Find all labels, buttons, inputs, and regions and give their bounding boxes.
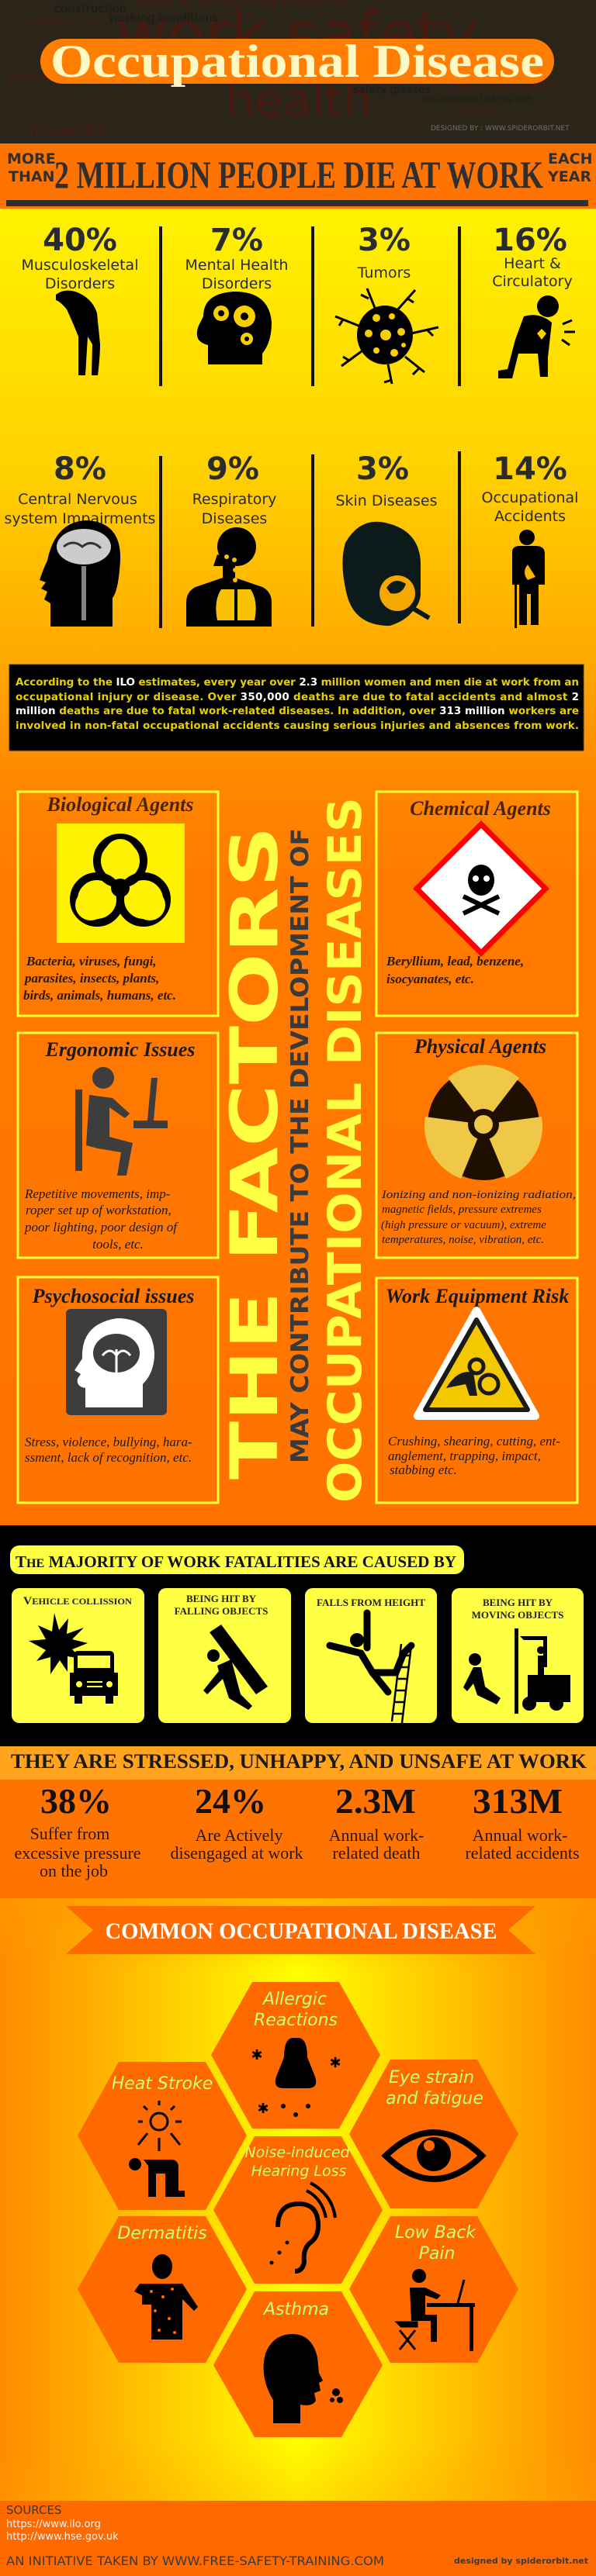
icon: warning triangle gears xyxy=(418,1310,535,1416)
heading pill: majority of work fatalities xyxy=(10,1545,464,1574)
banner: stressed unhappy unsafe: THEY ARE STRESSED, UNHAPPY, AND UNSAFE AT WORK xyxy=(11,1750,587,1773)
footer: sources: SOURCES xyxy=(6,2503,61,2517)
header: word cloud background: work safety xyxy=(116,0,478,71)
hexagon: noise-induced hearing loss: Noise-induced xyxy=(244,2144,351,2161)
header: word cloud background: violence xyxy=(528,50,567,60)
card: falling objects xyxy=(158,1588,291,1723)
work stats: related death xyxy=(332,1843,421,1863)
vertical heading: the factors may contribute to the development of occupational diseases: MAY CONTRIBUTE TO THE DEVELOPMENT OF xyxy=(286,828,314,1463)
black fatalities section xyxy=(0,1525,596,1746)
panel: biological agents: Bacteria, viruses, fungi, xyxy=(26,954,157,969)
stat: occupational accidents xyxy=(482,451,578,628)
ILO text box: million deaths are due to fatal work-related diseases. In addition, over 313 million workers are xyxy=(16,705,579,717)
panel: physical agents: (high pressure or vacuum), extreme xyxy=(381,1219,546,1231)
hexagon: allergic reactions: Reactions xyxy=(254,2011,338,2030)
stat: musculoskeletal: Musculoskeletal xyxy=(22,257,138,274)
panel: ergonomic issues: Repetitive movements, imp- xyxy=(24,1186,171,1201)
banner: stressed unhappy unsafe xyxy=(0,1746,596,1780)
hexagon: allergic reactions: Allergic xyxy=(262,1990,327,2009)
hexagon: asthma xyxy=(213,2291,383,2437)
footer: sources: https://www.ilo.org xyxy=(6,2519,101,2530)
hexagon: heat stroke xyxy=(78,2062,247,2210)
hexagon: dermatitis: Dermatitis xyxy=(117,2224,207,2243)
stat: respiratory xyxy=(186,451,276,627)
panel: physical agents xyxy=(376,1033,577,1258)
panel: ergonomic issues: tools, etc. xyxy=(92,1237,144,1252)
panel: biological agents: Biological Agents xyxy=(47,793,194,816)
ILO text box: occupational injury or disease. Over 350,000 deaths are due to fatal accidents and almost 2 xyxy=(16,691,579,703)
stat: mental health: Disorders xyxy=(202,275,272,292)
vertical heading: the factors may contribute to the development of occupational diseases: OCCUPATIONAL DISEASES xyxy=(318,797,372,1503)
panel: physical agents: Ionizing and non-ionizing radiation, xyxy=(381,1189,576,1201)
panel: biological agents: birds, animals, humans, etc. xyxy=(23,988,176,1003)
stat: musculoskeletal xyxy=(22,223,138,375)
headline band: THAN xyxy=(9,168,54,185)
ILO text box xyxy=(9,665,584,751)
stat: occupational accidents: Accidents xyxy=(494,508,566,525)
work stats: Are Actively xyxy=(195,1825,283,1845)
hexagon: allergic reactions xyxy=(211,1982,380,2129)
hexagon: noise-induced hearing loss: Hearing Loss xyxy=(251,2163,347,2180)
header: word cloud background: biological agents xyxy=(454,78,553,92)
card: moving objects: BEING HIT BY xyxy=(483,1597,553,1608)
footer: initiative line: AN INITIATIVE TAKEN BY WWW.FREE-SAFETY-TRAINING.COM xyxy=(6,2554,384,2568)
panel: physical agents: Physical Agents xyxy=(414,1035,546,1058)
panel: psychosocial issues: Psychosocial issues xyxy=(32,1285,194,1307)
panel: chemical agents: Beryllium, lead, benzene, xyxy=(386,954,524,969)
panel: psychosocial issues: ssment, lack of recognition, etc. xyxy=(25,1450,192,1465)
work stats: 24% xyxy=(195,1781,266,1821)
hexagon: allergic reactions: ✱ xyxy=(329,2055,341,2071)
stat: occupational accidents: 14% xyxy=(493,451,567,487)
ILO text box: involved in non-fatal occupational accidents causing serious injuries and absences from work. xyxy=(16,720,579,732)
stat: central nervous system: 8% xyxy=(54,451,106,487)
header: word cloud background xyxy=(0,0,596,143)
headline band xyxy=(0,143,596,209)
hexagon: allergic reactions: ✱ xyxy=(251,2047,263,2063)
stat: heart and circulatory: Heart & xyxy=(504,255,561,272)
panel: physical agents: temperatures, noise, vibration, etc. xyxy=(382,1234,544,1246)
panel: ergonomic issues xyxy=(18,1033,218,1258)
footer: sources xyxy=(0,2501,596,2576)
hexagon: noise-induced hearing loss xyxy=(213,2136,383,2284)
header: word cloud background: inspector xyxy=(29,121,109,140)
panel: physical agents: magnetic fields, pressure extremes xyxy=(382,1203,542,1216)
factors section background xyxy=(0,775,596,1525)
hexagon: low back pain: Low Back xyxy=(395,2223,476,2243)
panel: biological agents: parasites, insects, plants, xyxy=(23,971,159,986)
header: word cloud background: chemicals xyxy=(8,70,70,85)
header: word cloud background: safety glasses xyxy=(353,84,430,96)
header: word cloud background: long working hours xyxy=(23,16,106,26)
header: word cloud background: occupational hearing loss xyxy=(423,93,532,103)
hexagon: eye strain: and fatigue xyxy=(386,2089,483,2108)
hexagon: dermatitis xyxy=(78,2216,247,2363)
card: vehicle collision: VEHICLE COLLISSION xyxy=(23,1595,132,1607)
panel: psychosocial issues: Stress, violence, bullying, hara- xyxy=(25,1435,192,1449)
card: moving objects: MOVING OBJECTS xyxy=(472,1609,563,1621)
stat: skin diseases xyxy=(335,451,438,626)
panel: ergonomic issues: roper set up of workstation, xyxy=(26,1203,172,1217)
icon: head with brain xyxy=(66,1309,167,1415)
panel: work equipment risk: Work Equipment Risk xyxy=(386,1285,569,1307)
card: falling objects: BEING HIT BY xyxy=(186,1593,257,1604)
card: falling objects: FALLING OBJECTS xyxy=(175,1605,268,1617)
stat: central nervous system: Central Nervous xyxy=(18,491,137,508)
panel: work equipment risk: stabbing etc. xyxy=(390,1462,457,1477)
vertical heading: the factors may contribute to the development of occupational diseases xyxy=(217,797,372,1503)
heading pill: majority of work fatalities: THE MAJORITY OF WORK FATALITIES ARE CAUSED BY xyxy=(16,1552,456,1571)
icon: radiation xyxy=(414,1065,553,1185)
work stats: 313M xyxy=(473,1781,563,1821)
stat: mental health xyxy=(185,223,288,364)
stat: central nervous system xyxy=(5,451,155,627)
hexagon: low back pain: Pain xyxy=(419,2244,455,2263)
work stats: on the job xyxy=(40,1861,108,1880)
hexagon: allergic reactions: ✱ xyxy=(257,2101,269,2117)
work stats: 2.3M xyxy=(335,1781,416,1821)
stat: heart and circulatory: Circulatory xyxy=(492,273,573,290)
stat: respiratory: 9% xyxy=(206,451,259,487)
stat: respiratory: Respiratory xyxy=(192,491,276,508)
panel: work equipment risk: Crushing, shearing, cutting, ent- xyxy=(388,1434,560,1449)
header: word cloud background: DESIGNED BY : WWW.SPIDERORBIT.NET xyxy=(431,125,570,133)
headline band: EACH xyxy=(548,150,593,167)
vertical heading: the factors may contribute to the development of occupational diseases: THE FACTORS xyxy=(217,826,293,1480)
card: moving objects xyxy=(452,1588,584,1723)
hexagon: eye strain: Eye strain xyxy=(389,2068,474,2087)
icon: worker at computer xyxy=(75,1067,168,1176)
header: word cloud background: construction xyxy=(54,2,126,16)
stats grid: disease percentages xyxy=(5,223,578,628)
stat: mental health: 7% xyxy=(210,223,263,258)
hexagon: eye strain xyxy=(349,2060,518,2208)
stat: mental health: Mental Health xyxy=(185,257,288,274)
ribbon banner: common occupational disease xyxy=(66,1906,535,1954)
headline band: YEAR xyxy=(547,168,591,185)
work stats: Annual work- xyxy=(329,1825,424,1845)
headline band: MORE xyxy=(7,150,56,167)
panel: chemical agents: isocyanates, etc. xyxy=(386,972,474,986)
panel: ergonomic issues: poor lighting, poor design of xyxy=(24,1220,178,1234)
header: word cloud background: working conditions xyxy=(109,11,219,25)
lower gradient background xyxy=(0,1898,596,2501)
work stats: 38% xyxy=(40,1781,112,1821)
work stats: related accidents xyxy=(465,1843,580,1863)
stat: heart and circulatory xyxy=(492,223,575,378)
panel: psychosocial issues xyxy=(18,1277,218,1503)
icon: skull diamond xyxy=(417,824,546,953)
card: vehicle collision xyxy=(12,1588,144,1723)
stat: tumors: 3% xyxy=(358,223,411,258)
hexagon: low back pain xyxy=(349,2216,518,2363)
yellow stats section background xyxy=(0,209,596,775)
header: word cloud background: health xyxy=(225,74,372,128)
stat: skin diseases: Skin Diseases xyxy=(335,492,438,509)
stat: central nervous system: system Impairments xyxy=(5,510,155,527)
work stats: disengaged at work xyxy=(170,1843,303,1863)
card: falls from height xyxy=(305,1588,437,1723)
work stats: excessive pressure xyxy=(14,1843,141,1863)
work stats: Annual work- xyxy=(473,1825,567,1845)
stat: heart and circulatory: 16% xyxy=(493,223,567,258)
hexagon: heat stroke: Heat Stroke xyxy=(112,2074,213,2094)
panel: work equipment risk: anglement, trapping, impact, xyxy=(388,1449,541,1463)
panel: biological agents xyxy=(18,792,218,1016)
hexagon: asthma: Asthma xyxy=(262,2300,329,2319)
icon: biohazard xyxy=(57,824,185,943)
stat: musculoskeletal: 40% xyxy=(43,223,117,258)
stat: musculoskeletal: Disorders xyxy=(45,275,115,292)
footer: sources: designed by spiderorbit.net xyxy=(454,2556,588,2566)
panel: ergonomic issues: Ergonomic Issues xyxy=(45,1038,195,1061)
panel: chemical agents: Chemical Agents xyxy=(410,797,551,820)
panel: work equipment risk xyxy=(376,1278,577,1503)
title pill: Occupational Disease xyxy=(50,36,544,87)
ILO text box: According to the ILO estimates, every year over 2.3 million women and men die at work from an xyxy=(16,676,579,689)
stat: tumors xyxy=(335,223,438,384)
stat: respiratory: Diseases xyxy=(202,510,267,527)
ribbon banner: common occupational disease: COMMON OCCUPATIONAL DISEASE xyxy=(106,1918,497,1944)
card: falls from height: FALLS FROM HEIGHT xyxy=(317,1597,425,1608)
stat: tumors: Tumors xyxy=(357,264,411,281)
work stats: Suffer from xyxy=(30,1824,109,1843)
stat: skin diseases: 3% xyxy=(356,451,409,487)
panel: chemical agents xyxy=(376,792,577,1016)
header: word cloud background: burns xyxy=(454,102,497,120)
stat: occupational accidents: Occupational xyxy=(482,489,578,506)
work stats xyxy=(0,1780,596,1898)
footer: sources: http://www.hse.gov.uk xyxy=(6,2531,119,2543)
